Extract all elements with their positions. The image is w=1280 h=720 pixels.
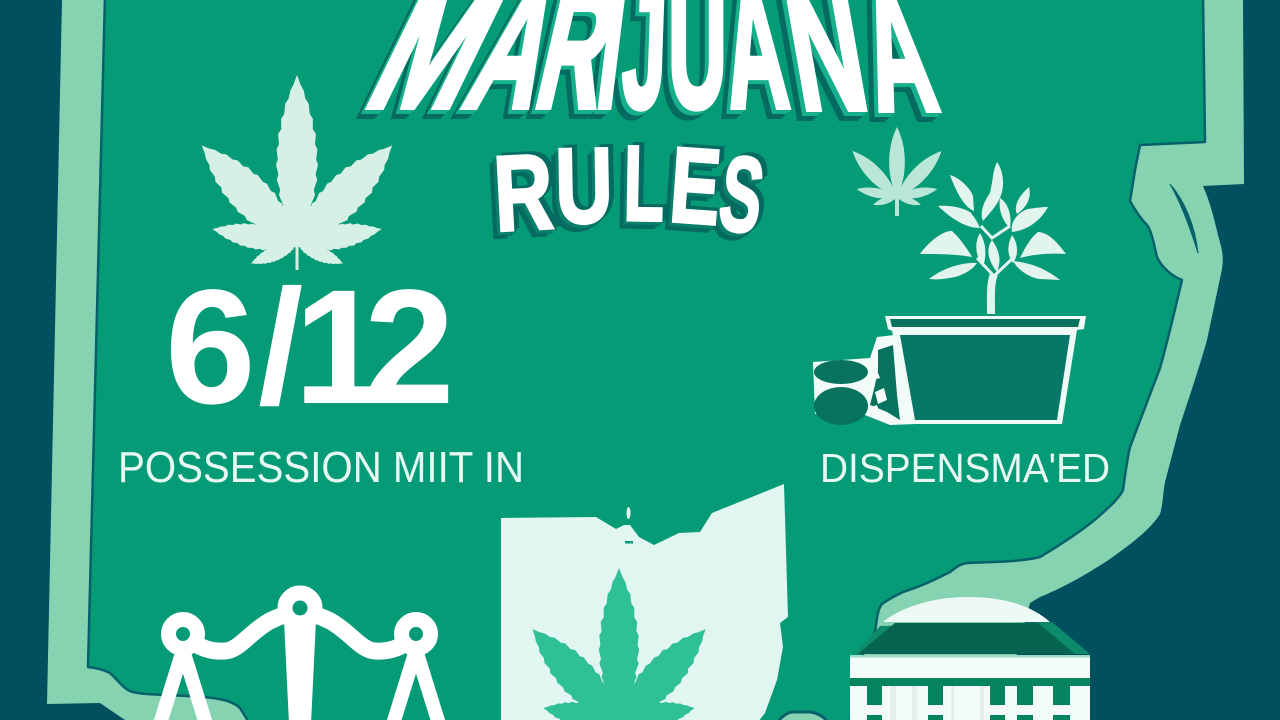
icon: capitol building [850, 597, 1090, 720]
icon: large cannabis leaf [187, 75, 407, 271]
icon: scales of justice [160, 593, 439, 720]
title: MARIJUANA [342, 0, 950, 147]
title: RULES: S [713, 132, 771, 257]
bottom border bump [778, 712, 828, 720]
dispensary label: DISPENSMA'ED [820, 445, 1110, 491]
title: RULES [489, 123, 771, 257]
icon: small cannabis leaf [847, 127, 947, 216]
title: RULES: R [491, 131, 556, 254]
possession label: POSSESSION MIIT IN [118, 443, 524, 492]
icon: leaf on Ohio [519, 568, 719, 720]
title: RULES: U [554, 125, 614, 246]
roof [855, 622, 1090, 654]
icon: potted plant [813, 162, 1086, 425]
spilled stones [813, 335, 916, 425]
title: RULES: L [623, 123, 665, 244]
pot [885, 316, 1086, 424]
plant [920, 162, 1066, 314]
border crease detail [1170, 184, 1198, 253]
facade [850, 655, 1090, 720]
title: RULES: E [666, 124, 725, 247]
icon: Ohio state silhouette [501, 484, 788, 720]
stat number: 6/12 [165, 255, 455, 438]
windows [867, 686, 1070, 720]
dome [883, 597, 1050, 622]
